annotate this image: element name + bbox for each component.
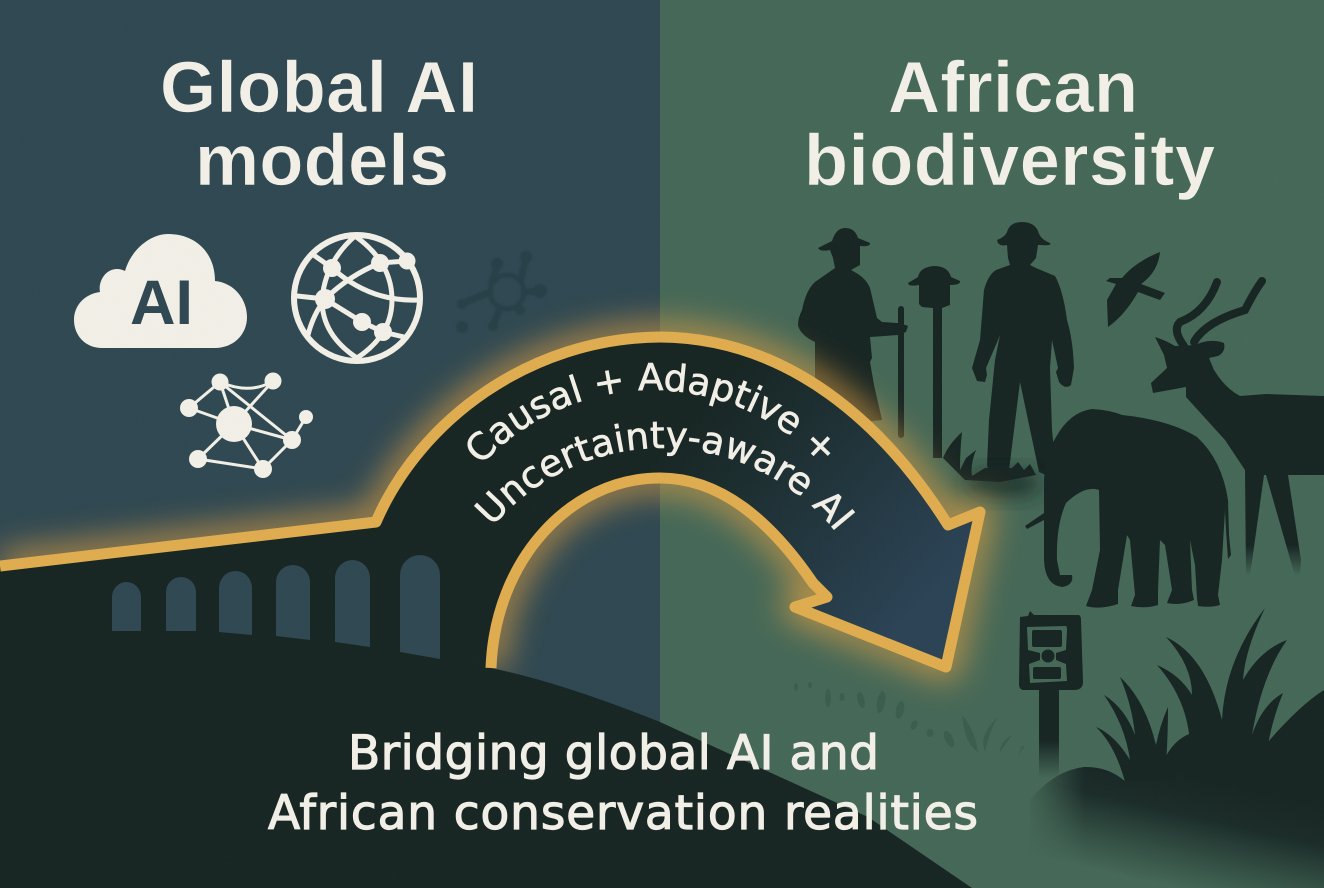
ground patch below ranger [963,472,1043,496]
arrow glow [0,337,980,668]
icon: AI cloud [74,234,247,348]
silhouette: bush and mound [1030,608,1324,888]
arrow label: Uncertainty-aware AI [474,422,856,530]
arrow label: Causal + Adaptive + [467,362,830,460]
caption [268,726,978,841]
bridge arches [112,555,440,659]
dark hill base [0,500,972,888]
silhouette: antelope [1151,281,1324,576]
heading: African biodiversity [804,48,1215,201]
curved arrow body [376,337,980,668]
icon: neural network graph [180,372,313,478]
heading: Global AI models [160,48,478,201]
arrow gold outline [0,337,980,668]
heading: African biodiversity: African [888,48,1138,128]
silhouette: bird [1106,252,1165,327]
caption: African conservation realities [268,786,978,841]
caption: Bridging global AI and [348,726,879,781]
silhouette: elephant [1025,409,1231,608]
silhouette: ranger standing [963,222,1074,496]
background: African biodiversity side [660,0,1324,888]
heading: Global AI models: models [195,121,449,201]
icon: camera trap [1019,611,1083,778]
silhouette: sensor post [908,266,960,458]
icon: AI cloud: AI [130,268,193,338]
heading: African biodiversity: biodiversity [804,121,1215,201]
silhouette: ranger with staff [798,228,908,438]
arrow label [467,362,856,530]
icon: faint molecule [456,251,547,333]
heading: Global AI models: Global AI [160,48,478,128]
icon: network globe [294,235,420,361]
faint footprints and plant [794,682,1025,756]
background: global AI side [0,0,660,888]
silhouette: grass by ranger [943,432,1036,482]
